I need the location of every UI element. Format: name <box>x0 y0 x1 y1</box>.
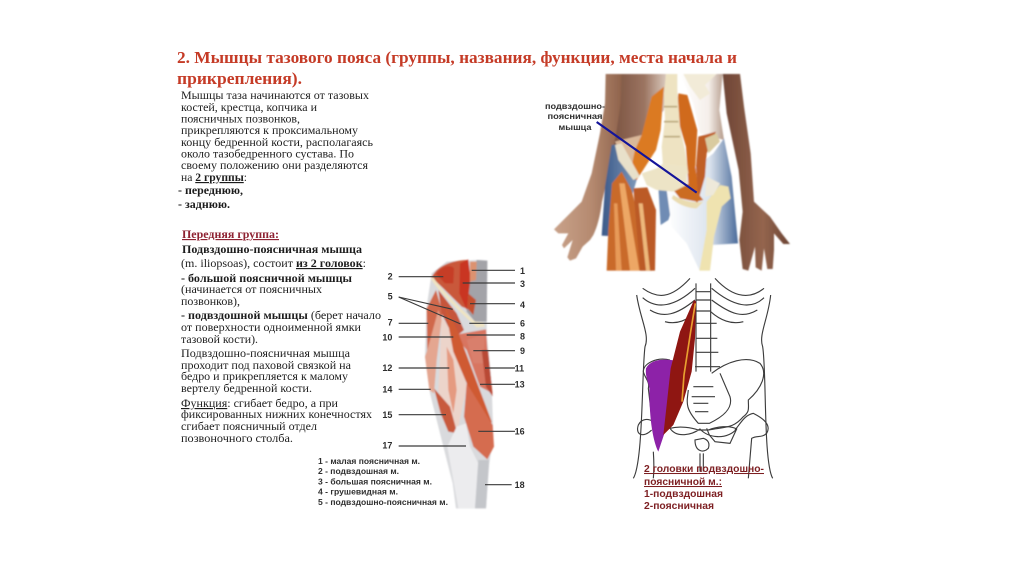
caption: two heads <box>644 464 765 512</box>
text block: anterior group: - подвздошной мышцы (берет начало <box>181 309 381 322</box>
number labels: 8 <box>520 331 525 341</box>
illustration: pelvis on human figure <box>554 74 790 271</box>
leg muscles <box>607 172 652 271</box>
number labels: 3 <box>520 279 525 289</box>
text block: anterior group: от поверхности одноименной ямки <box>181 321 361 334</box>
text block: anterior group: (начинается от поясничных <box>181 283 322 296</box>
pelvis bones <box>642 163 687 192</box>
number labels: 9 <box>520 346 525 356</box>
number labels: 4 <box>520 300 525 310</box>
caption: two heads: 1-подвздошная <box>644 489 723 500</box>
spine <box>662 74 688 177</box>
number labels: 11 <box>515 363 524 373</box>
number labels: 7 <box>388 317 393 327</box>
legend: muscle names: 3 - большая поясничная м. <box>318 476 432 486</box>
text block: anterior group: сгибает поясничный отдел <box>181 420 317 433</box>
number labels: 13 <box>515 379 525 389</box>
text block: anterior group: Подвздошно-поясничная мышца <box>182 243 362 256</box>
skeleton outline <box>633 278 773 478</box>
text block: introduction: своему положению они разделяются <box>181 159 369 172</box>
number labels: 1 <box>520 266 525 276</box>
femur <box>699 185 731 271</box>
heading: anterior group: Передняя группа: <box>182 228 279 241</box>
thigh anatomy drawing <box>425 259 494 508</box>
number labels: 10 <box>382 333 392 343</box>
number labels: 16 <box>515 427 525 437</box>
torso skin <box>612 74 666 148</box>
legend: muscle names <box>318 456 448 507</box>
text block: anterior group: (m. iliopsoas), состоит из 2 головок: <box>181 257 366 270</box>
iliacus and psoas muscles <box>631 87 664 180</box>
title <box>177 48 738 88</box>
number labels: 12 <box>382 363 392 373</box>
text block: introduction: Мышцы таза начинаются от тазовых <box>181 89 369 102</box>
number labels: 6 <box>520 319 525 329</box>
caption: iliopsoas label: мышца <box>558 122 592 132</box>
text block: anterior group: фиксированных нижних конечностях <box>181 408 372 421</box>
illustration: thigh muscles <box>382 259 525 508</box>
title: прикрепления). <box>177 69 302 88</box>
text block: introduction: - переднюю, <box>178 184 243 197</box>
text block: introduction: около тазобедренного сустава. По <box>181 148 354 160</box>
legend: muscle names: 5 - подвздошно-поясничная м. <box>318 497 448 507</box>
text block: anterior group: бедро и прикрепляется к малому <box>181 370 348 383</box>
title: 2. Мышцы тазового пояса (группы, названия, функции, места начала и <box>177 48 738 67</box>
legend: muscle names: 4 - грушевидная м. <box>318 486 398 496</box>
caption: iliopsoas label: подвздошно- <box>545 101 605 111</box>
number labels: 15 <box>382 410 392 420</box>
number labels: 5 <box>388 292 393 302</box>
arrow: pointer to muscle <box>597 122 697 193</box>
caption: iliopsoas label: поясничная <box>548 111 602 121</box>
right arm and hand <box>723 74 790 271</box>
text block: anterior group: тазовой кости). <box>181 333 258 346</box>
text block: anterior group: позвонков), <box>181 295 240 308</box>
legend: muscle names: 1 - малая поясничная м. <box>318 456 420 466</box>
text block: anterior group: позвоночного столба. <box>181 432 293 445</box>
text block: introduction: на 2 группы: <box>181 171 247 184</box>
text block: anterior group: проходит под паховой связкой на <box>181 359 351 372</box>
text block: anterior group: вертелу бедренной кости. <box>181 382 312 395</box>
psoas tendon highlight <box>682 303 695 402</box>
number labels <box>382 266 525 490</box>
illustration: skeleton with two heads of iliopsoas <box>633 278 773 478</box>
text block: anterior group <box>181 228 381 445</box>
text block: introduction: - заднюю. <box>178 198 230 211</box>
text block: introduction: прикрепляются к проксимальному <box>181 124 358 137</box>
number labels: 14 <box>382 384 392 394</box>
text block: introduction: поясничных позвонков, <box>181 112 300 126</box>
caption: two heads: 2 головки подвздошно- <box>644 464 765 475</box>
iliacus muscle <box>646 360 673 452</box>
caption: two heads: поясничной м.: <box>644 477 722 488</box>
caption: iliopsoas label <box>545 101 605 132</box>
text block: introduction: костей, крестца, копчика и <box>181 101 317 114</box>
caption: two heads: 2-поясничная <box>644 501 714 512</box>
body drawing <box>554 74 790 271</box>
number labels: 2 <box>388 271 393 281</box>
text block: anterior group: Функция: сгибает бедро, а при <box>181 397 338 410</box>
text block: anterior group: - большой поясничной мышцы <box>181 272 352 285</box>
pelvis blue shapes <box>602 143 637 237</box>
leader lines <box>399 270 515 485</box>
text block: introduction <box>178 89 373 211</box>
number labels: 17 <box>382 440 392 450</box>
legend: muscle names: 2 - подвздошная м. <box>318 466 399 476</box>
text block: anterior group: Подвздошно-поясничная мышца <box>181 347 350 360</box>
number labels: 18 <box>515 480 525 490</box>
left arm and hand <box>554 74 622 261</box>
text block: introduction: концу бедренной кости, располагаясь <box>181 136 373 149</box>
psoas muscle <box>663 300 696 435</box>
